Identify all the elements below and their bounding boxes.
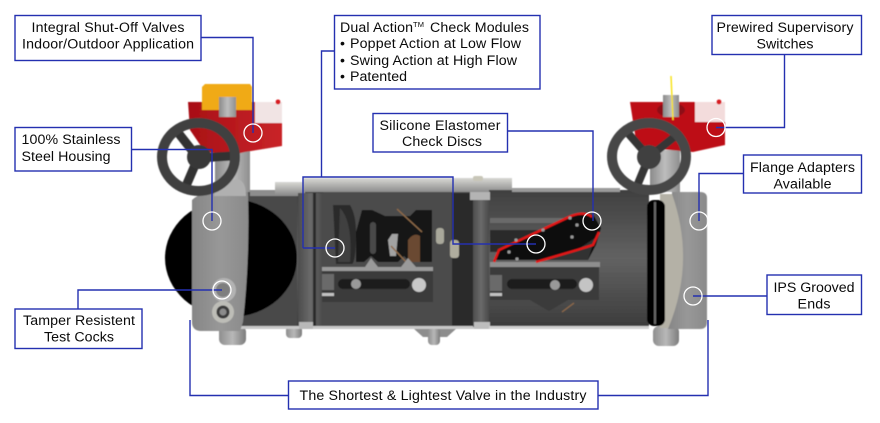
left black end cap: [165, 199, 297, 317]
callout: silicone elastomer check discs: [373, 114, 601, 230]
black seal rings and inner sleeve: [647, 194, 694, 328]
callout: tamper resistent test cocks: Tamper Resistent: [23, 313, 135, 329]
callout: ips grooved ends: [684, 275, 862, 314]
guide pins: [436, 228, 459, 258]
callout: integral shut-off valves: Indoor/Outdoor Application: [22, 36, 194, 52]
callout: silicone elastomer check discs: Silicone Elastomer: [380, 118, 501, 134]
callout: stainless steel housing: Steel Housing: [22, 149, 110, 165]
callout: dual action check modules: Patented: [350, 69, 407, 85]
callout: flange adapters available: [690, 155, 862, 230]
callout: tamper resistent test cocks: [15, 281, 231, 348]
callout: flange adapters available: Flange Adapters: [750, 160, 855, 176]
right flange: [668, 192, 707, 329]
left handwheel: [162, 123, 235, 191]
callout: dual action check modules: Dual Action: [340, 20, 413, 36]
callout: tamper resistent test cocks: Test Cocks: [44, 330, 114, 346]
callout: prewired supervisory switches: [707, 16, 862, 136]
callout: shortest and lightest valve bracket: The Shortest & Lightest Valve in the Industry: [300, 388, 587, 404]
callout: dual action check modules: [303, 16, 545, 257]
left stainless flange: [192, 191, 248, 331]
callout: stainless steel housing: 100% Stainless: [22, 132, 120, 148]
callout: silicone elastomer check discs: Check Discs: [402, 134, 482, 150]
callout: dual action check modules: Check Modules: [430, 20, 529, 36]
left check module: [322, 205, 433, 302]
callout: dual action check modules: TM: [413, 20, 424, 29]
callout: integral shut-off valves: [15, 16, 262, 142]
mounting feet: [219, 326, 679, 346]
right body section: [452, 176, 649, 329]
left body section: [240, 178, 512, 329]
callout: flange adapters available: Available: [774, 176, 832, 192]
right valve actuator: [630, 76, 725, 192]
test cock: [212, 278, 236, 323]
callout: dual action check modules: Poppet Action at Low Flow: [350, 36, 522, 52]
callout: ips grooved ends: Ends: [798, 296, 830, 312]
callout: integral shut-off valves: Integral Shut-Off Valves: [32, 20, 184, 36]
callout: prewired supervisory switches: Switches: [756, 36, 814, 52]
callout: dual action check modules: •: [340, 69, 345, 85]
callout: dual action check modules: •: [340, 53, 345, 69]
left valve actuator: [188, 84, 282, 196]
valve assembly: [162, 76, 725, 346]
callout: shortest and lightest valve bracket: [190, 320, 708, 409]
callout: stainless steel housing: [15, 128, 221, 230]
right check module with red disc seal: [490, 213, 601, 312]
callout: ips grooved ends: IPS Grooved: [774, 280, 854, 296]
right handwheel: [612, 123, 686, 190]
callout: dual action check modules: •: [340, 36, 345, 52]
callout: prewired supervisory switches: Prewired Supervisory: [716, 20, 854, 36]
callout: dual action check modules: Swing Action at High Flow: [350, 53, 518, 69]
